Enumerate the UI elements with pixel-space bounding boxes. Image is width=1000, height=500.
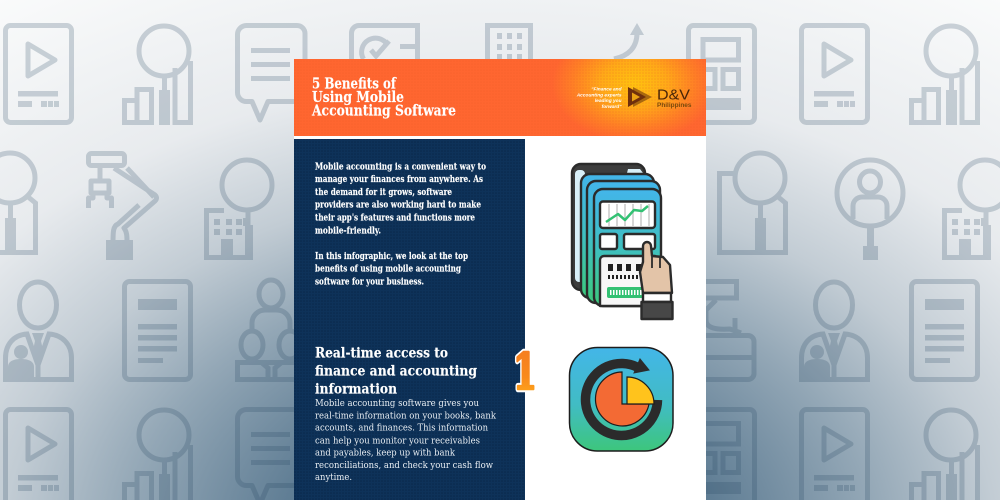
icon: group of people [238,280,301,380]
infographic page [294,59,706,500]
header banner [294,59,706,136]
number 1 [513,342,537,401]
title: 5 Benefits of [312,75,397,92]
icon: checklist [352,26,419,59]
jacket sleeve [642,302,672,319]
tagline: Accounting experts [576,92,622,98]
icon: hand on box [690,282,754,380]
icon: magnified bar chart [124,410,190,500]
phone back [572,164,645,290]
intro text: In this infographic, we look at the top [315,251,468,262]
tagline: leading you [595,98,622,104]
button cards [600,234,617,249]
icon: magnified bar chart [124,26,190,125]
navy text column [294,139,525,500]
D&amp;V Philippines logo [628,86,692,109]
icon: robotic arm [88,154,156,260]
icon: report document [912,282,978,380]
icon: speech bubble [237,409,305,500]
tagline: forward" [602,104,622,110]
icon: pie chart refresh app [570,348,673,451]
shirt cuff [643,293,671,302]
yellow pie slice [627,377,654,404]
title [311,75,456,120]
icon: rising arrow [614,23,644,59]
icon: magnified document [720,153,786,253]
section body text: anytime. [315,472,352,483]
intro text: Mobile accounting is a convenient way to [315,161,486,172]
section body text: can help you monitor your receivables [315,435,480,446]
icon: magnified building [206,160,272,260]
intro text: manage your finances from anywhere. As [315,174,483,185]
section body text: reconciliations, and check your cash flow [315,460,493,471]
icon: magnified document [0,153,36,253]
stacked screens [581,174,654,298]
circular arrow [586,363,658,435]
icon: magnified bar chart [912,26,978,125]
D&amp;V Philippines logo: D&V [657,86,690,104]
line chart card [600,202,655,228]
title: Accounting Software [311,103,456,120]
intro text: software for your business. [315,277,424,288]
icon: businessman [6,282,72,381]
section heading [315,345,477,397]
icon: video document [802,26,868,122]
number 1: 1 [513,342,537,401]
pointing hand [640,242,672,293]
orange pie slice [595,372,649,426]
icon: video document [802,410,868,500]
number 1: 1 [513,342,537,401]
section heading: Real-time access to [315,345,448,361]
icon: video document [6,26,72,122]
icon: report document [124,282,190,380]
intro text: the demand for it grows, software [315,187,452,198]
tagline: "Finance and [591,86,623,92]
intro text: their app's features and functions more [315,212,475,223]
icon: page layout [688,26,754,122]
icon: speech bubble [237,25,305,120]
tagline [576,86,623,110]
section body text: accounts, and finances. This information [315,423,488,434]
D&amp;V Philippines logo: Philippines [657,102,692,109]
section body text: real-time information on your books, bank [315,410,496,421]
keypad card [600,256,657,306]
section body text: and payables, keep up with bank [315,448,455,459]
section heading: information [315,381,397,397]
icon: businessman [802,282,868,381]
page background [294,59,706,500]
section heading: finance and accounting [315,363,477,379]
app tile [570,348,673,451]
icon: page layout [688,410,754,500]
intro text: providers are also working hard to make [315,200,481,211]
section body text: Mobile accounting software gives you [315,398,479,409]
icon: office building [488,26,530,59]
icon: mobile accounting app [572,164,672,319]
intro text [315,161,486,288]
title: Using Mobile [312,89,404,106]
icon: magnified person [837,160,903,260]
icon: video document [6,410,72,500]
intro text: benefits of using mobile accounting [315,264,461,275]
intro text: mobile-friendly. [315,225,381,236]
icon: magnified bar chart [912,410,978,500]
section body text [315,398,496,483]
icon: magnified building [944,160,1000,260]
